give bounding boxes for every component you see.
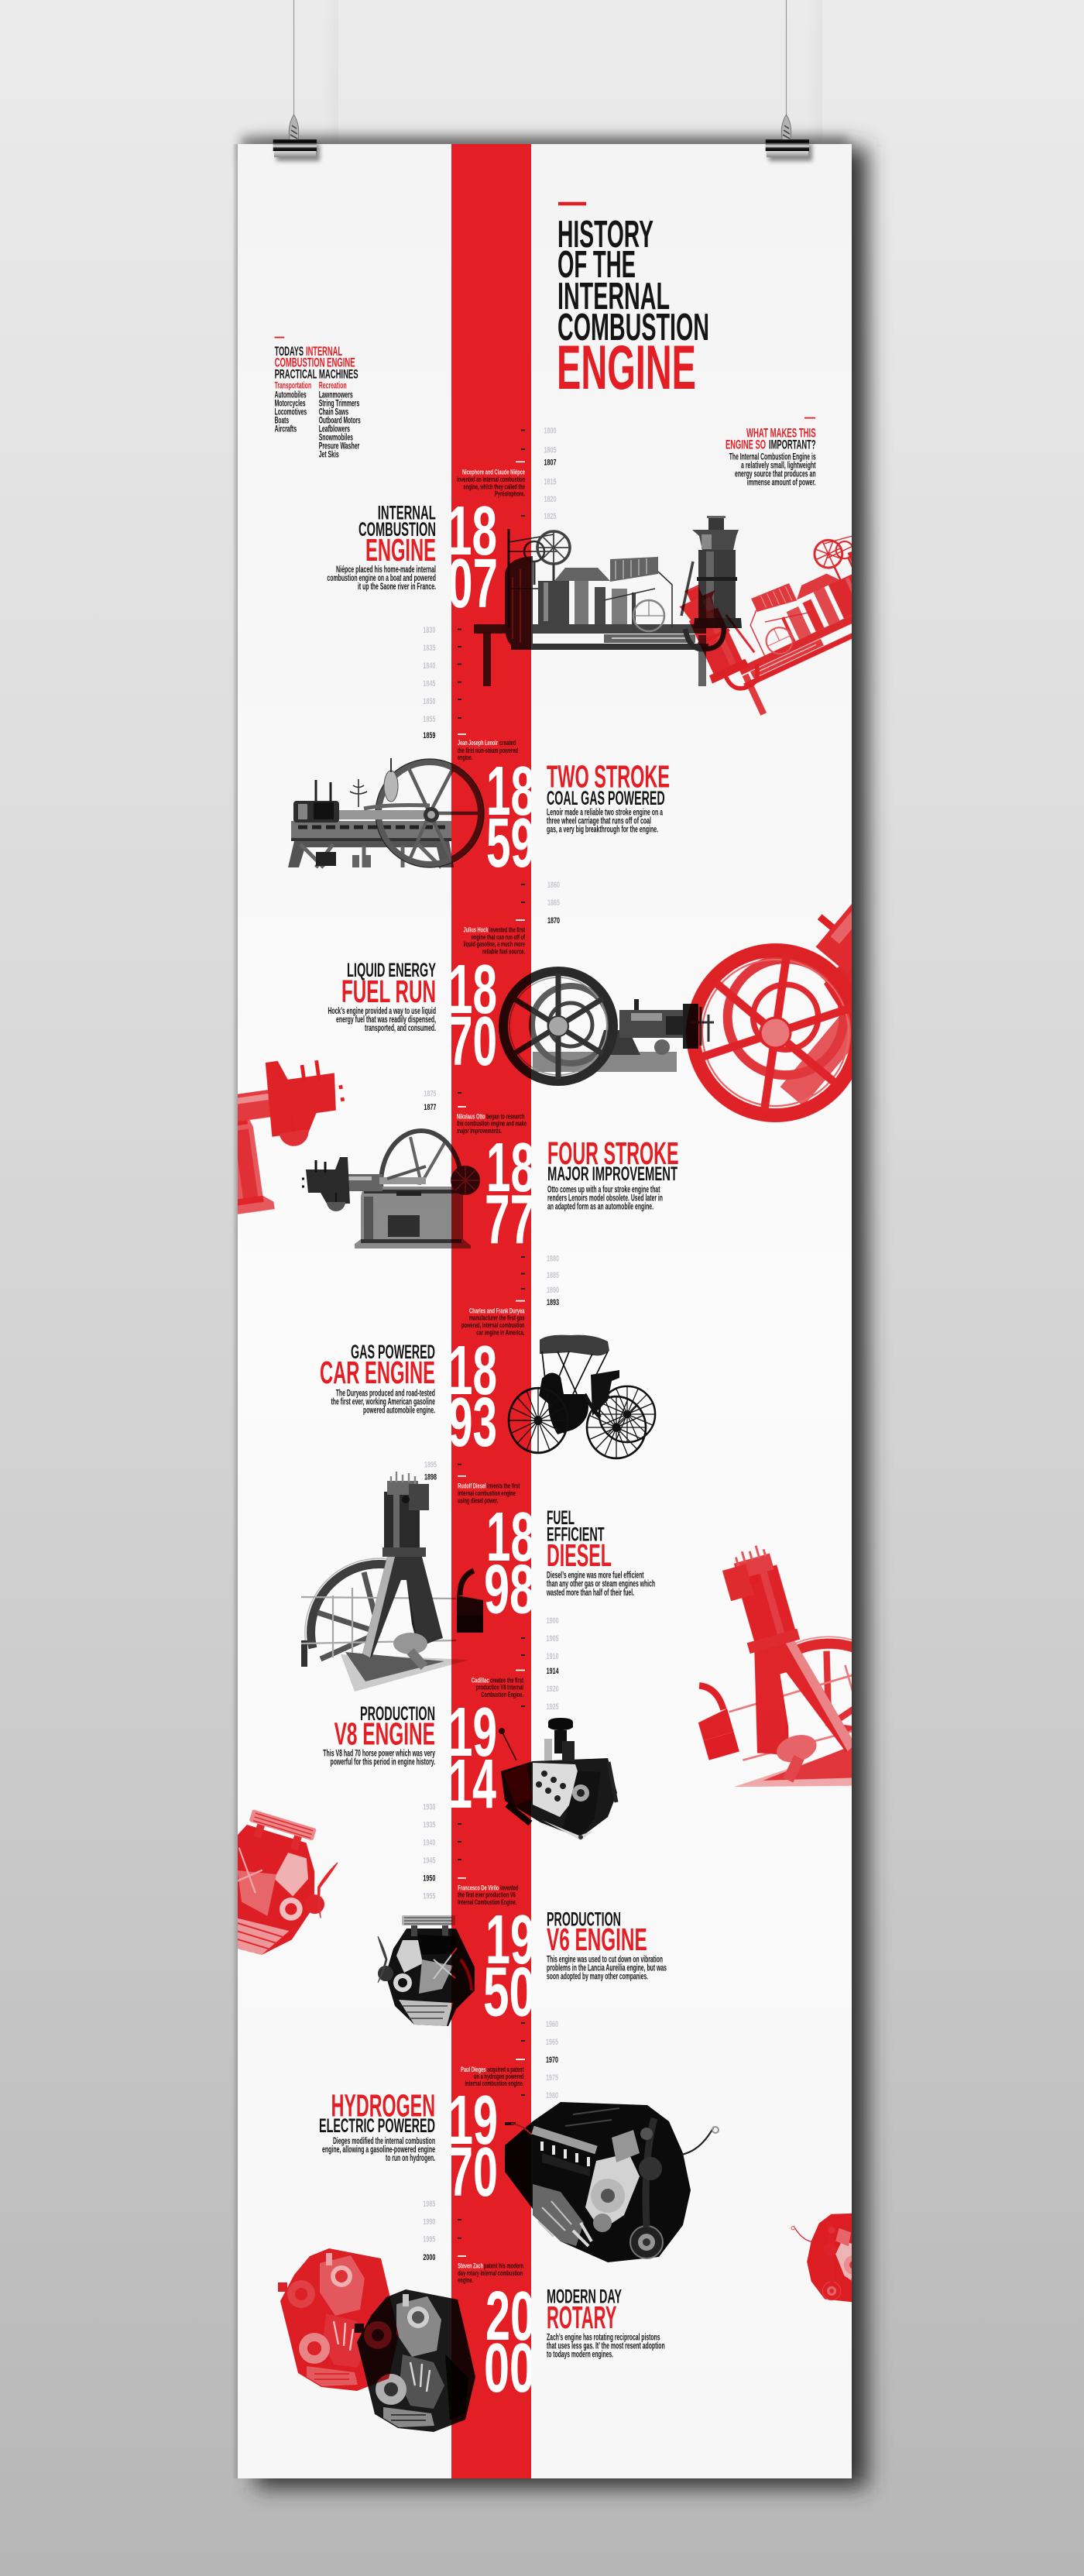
big years on the red band: 59	[486, 805, 535, 882]
caption 2000	[458, 2262, 523, 2285]
section 1898 text: than any other gas or steam engines which	[547, 1580, 655, 1589]
section 1870 text: transported, and consumed.	[365, 1024, 436, 1033]
red engine: V6 copy	[238, 1809, 338, 1955]
section 1970 text: to run on hydrogen.	[386, 2154, 435, 2163]
caption 1893	[461, 1307, 525, 1337]
caption 1859: Jean Joseph Lenoir	[458, 739, 498, 747]
why important panel: a relatively small, lightweight	[741, 462, 816, 471]
why important panel	[726, 417, 816, 488]
section 1859 text: gas, a very big breakthrough for the engine.	[547, 826, 658, 835]
timeline years left 1875-1877: 1877	[424, 1103, 436, 1112]
big years on the red band: 19	[485, 1901, 535, 1979]
section 1950 text	[547, 1908, 667, 1982]
big years on the red band: 07	[448, 545, 498, 623]
timeline years left 1930-1955: 1930	[423, 1803, 435, 1812]
section 1893 text: GAS POWERED	[351, 1341, 435, 1363]
section 1807 text	[327, 503, 436, 592]
caption 1877: began to research	[486, 1112, 525, 1121]
why important panel: IMPORTANT?	[769, 438, 816, 452]
section 1914 text: This V8 had 70 horse power which was very	[323, 1749, 435, 1758]
big years on the red band: 18	[486, 1129, 535, 1207]
caption 1877: the combustion engine and make	[457, 1120, 527, 1128]
caption 2000: engine.	[458, 2276, 473, 2285]
why important panel: immense amount of power.	[747, 479, 816, 488]
big years on the red band: 50	[483, 1953, 535, 2031]
timeline years right 1800-1825: 1815	[544, 477, 556, 486]
why important panel: The Internal Combustion Engine is	[729, 452, 816, 462]
section 1877 text: renders Lenoirs model obsolete. Used later in	[547, 1194, 663, 1204]
timeline years right 1880-1893: 1885	[547, 1271, 559, 1280]
timeline years right 1800-1825	[544, 427, 556, 521]
caption 1870	[463, 926, 526, 957]
title: OF THE	[557, 243, 636, 286]
practical machines panel: Recreation	[319, 382, 347, 391]
big years on the red band	[451, 506, 531, 2392]
big years on the red band: 70	[448, 1003, 497, 1080]
timeline years left 1985-2000: 2000	[423, 2253, 435, 2262]
practical machines panel: Locomotives	[275, 408, 307, 417]
timeline years left 1895-1898	[424, 1461, 437, 1482]
section 1950 text: This engine was used to cut down on vibration	[547, 1956, 663, 1965]
section 1807 text: it up the Saone river in France.	[358, 582, 436, 592]
engine illustration 1859	[288, 758, 484, 867]
timeline years left 1930-1955: 1955	[423, 1891, 435, 1901]
caption 1898: invents the first	[487, 1482, 520, 1491]
section 1870 text: LIQUID ENERGY	[347, 960, 436, 981]
timeline years right 1900-1925: 1900	[547, 1616, 559, 1626]
hanging clip right	[766, 0, 812, 161]
red engine: hydrogen copy	[791, 2214, 852, 2302]
timeline ticks	[458, 431, 525, 2256]
caption 1807: invented an internal combustion	[457, 476, 525, 484]
section 1898 text	[546, 1507, 655, 1598]
section 1859 text: Lenoir made a reliable two stroke engine on a	[547, 809, 663, 818]
big years on the red band: 20	[485, 2278, 535, 2355]
timeline years right 1880-1893: 1880	[547, 1255, 559, 1264]
section 1950 text: V6 ENGINE	[547, 1922, 647, 1957]
caption 1807: Pyréolophore.	[495, 490, 525, 499]
caption 1950: Internal Combustion Engine.	[458, 1898, 516, 1907]
red engine: 1877 copy	[238, 1060, 345, 1214]
section 2000 text	[547, 2286, 665, 2360]
practical machines panel: Boats	[275, 417, 289, 426]
caption 1970	[461, 2066, 524, 2088]
section 1893 text: The Duryeas produced and road-tested	[336, 1389, 435, 1399]
section 1807 text: COMBUSTION	[358, 519, 436, 541]
caption 1914: production V8 Internal	[476, 1684, 523, 1692]
big years on the red band: 18	[447, 493, 497, 570]
timeline years right 1900-1925: 1905	[547, 1634, 559, 1643]
practical machines panel: Snowmobiles	[319, 434, 353, 443]
section 1877 text: MAJOR IMPROVEMENT	[547, 1163, 678, 1185]
caption 1898	[458, 1482, 520, 1505]
caption 1807	[457, 469, 525, 499]
title	[557, 202, 709, 403]
practical machines panel: Leafblowers	[319, 425, 350, 434]
timeline years left 1895-1898: 1898	[424, 1473, 437, 1482]
section 2000 text: MODERN DAY	[547, 2286, 622, 2308]
caption 1807: engine, which they called the	[463, 483, 525, 491]
caption 2000: Steven Zach	[458, 2262, 483, 2271]
big years on the red band: 14	[448, 1746, 496, 1823]
caption 1870: reliable fuel source.	[482, 948, 525, 957]
timeline years left 1985-2000: 1990	[423, 2217, 435, 2227]
section 1893 text: CAR ENGINE	[320, 1355, 435, 1390]
section 1877 text: an adapted form as an automobile engine.	[547, 1202, 653, 1211]
section 1877 text: FOUR STROKE	[547, 1135, 678, 1171]
section 1870 text: energy fuel that was readily dispensed,	[336, 1015, 436, 1025]
timeline years right 1860-1870: 1860	[547, 881, 560, 890]
big years on the red band: 19	[448, 1694, 497, 1771]
section 1898 text: wasted more than half of their fuel.	[546, 1589, 634, 1598]
caption 1807: Nicephore and Claude Niépce	[462, 469, 525, 477]
section 1898 text: Diesel’s engine was more fuel efficient	[547, 1571, 644, 1581]
section 1807 text: INTERNAL	[378, 503, 436, 524]
timeline years right 1800-1825: 1800	[544, 427, 556, 436]
timeline years right 1900-1925: 1925	[547, 1702, 559, 1712]
caption 1950	[458, 1884, 519, 1907]
timeline years left 1830-1859: 1855	[423, 715, 435, 724]
engine illustration 1807	[474, 516, 742, 686]
why important panel: energy source that produces an	[735, 470, 816, 479]
practical machines panel	[275, 337, 361, 460]
caption 1970: on a hydrogen powered	[474, 2073, 524, 2081]
timeline years right 1900-1925: 1910	[547, 1652, 559, 1661]
poster sheet	[238, 144, 852, 2478]
section 1893 text: the first ever, working American gasoline	[331, 1397, 435, 1406]
caption 1877	[457, 1112, 527, 1135]
caption 2000: day rotary internal combustion	[458, 2269, 523, 2278]
timeline years left 1830-1859: 1845	[423, 679, 435, 689]
section 1870 text	[328, 960, 436, 1033]
caption 1914: Combustion Engine.	[481, 1691, 523, 1699]
caption 1950: Francesco De Virilo	[458, 1884, 499, 1892]
timeline years right 1960-1980	[546, 2020, 558, 2100]
section 2000 text: to todays modern engines.	[547, 2351, 613, 2360]
red engine: 1870 flywheel copy	[686, 904, 852, 1123]
practical machines panel: Chain Saws	[319, 408, 348, 417]
practical machines panel: Lawnmowers	[319, 391, 353, 400]
section 2000 text: that uses less gas. It’ the most resent adoption	[547, 2342, 665, 2351]
practical machines panel: Aircrafts	[275, 425, 297, 434]
why important panel: WHAT MAKES THIS	[746, 427, 816, 441]
caption 1859: the first non-steam powered	[458, 747, 518, 755]
caption 1893: car engine in America.	[476, 1328, 525, 1337]
timeline years left 1875-1877	[424, 1090, 436, 1112]
timeline years right 1800-1825: 1825	[544, 512, 556, 521]
timeline years left 1930-1955: 1935	[423, 1821, 435, 1830]
caption 1898: using diesel power.	[458, 1496, 498, 1505]
timeline years left 1895-1898: 1895	[424, 1461, 437, 1470]
section 1859 text: three wheel carriage that runs off of coal	[547, 816, 651, 826]
timeline years right 1860-1870: 1865	[547, 898, 560, 908]
timeline years right 1900-1925: 1920	[547, 1685, 559, 1694]
practical machines panel: Outboard Motors	[319, 417, 361, 426]
section 1970 text: Dieges modified the internal combustion	[333, 2137, 435, 2146]
caption 1970: acquired a patent	[487, 2066, 524, 2074]
big years on the red band: 18	[486, 753, 535, 830]
caption 1914: creates the first	[490, 1676, 524, 1685]
caption 1893: manufacturer the first gas	[469, 1314, 525, 1323]
practical machines panel: Jet Skis	[319, 451, 339, 460]
caption 1870: engine that can run off of	[472, 933, 526, 942]
practical machines panel: Transportation	[275, 382, 311, 391]
practical machines panel: Automobiles	[275, 391, 307, 400]
section 1870 text: Hock’s engine provided a way to use liquid	[328, 1007, 436, 1016]
section 1970 text: ELECTRIC POWERED	[319, 2115, 435, 2137]
caption 1950: invented	[500, 1884, 519, 1892]
timeline years right 1900-1925: 1914	[547, 1667, 559, 1676]
engine illustration 1950	[378, 1915, 475, 2026]
timeline years left 1830-1859	[423, 626, 435, 740]
section 1807 text: ENGINE	[365, 532, 436, 568]
section 1807 text: combustion engine on a boat and powered	[327, 574, 436, 583]
timeline years right 1800-1825: 1805	[544, 445, 556, 455]
caption 1870: liquid gasoline, a much more	[463, 940, 525, 949]
timeline years left 1830-1859: 1850	[423, 697, 435, 706]
big years on the red band: 19	[448, 2082, 498, 2159]
timeline years left 1985-2000: 1985	[423, 2200, 435, 2209]
timeline years left 1930-1955: 1950	[423, 1874, 435, 1884]
section 1859 text	[547, 759, 670, 835]
caption 1893: powered, internal combustion	[461, 1321, 525, 1330]
title: HISTORY	[557, 213, 653, 256]
caption 1970: Paul Dieges	[461, 2066, 486, 2074]
caption 2000: patent his modern	[484, 2262, 523, 2271]
practical machines panel: INTERNAL	[306, 345, 342, 359]
caption 1914	[472, 1676, 524, 1699]
section 1898 text: FUEL	[547, 1507, 575, 1529]
red engine: rotary copy	[278, 2248, 399, 2391]
caption 1898: internal combustion engine	[458, 1489, 516, 1498]
section 1970 text	[319, 2087, 435, 2163]
title: INTERNAL	[557, 275, 670, 318]
timeline years left 1930-1955	[423, 1803, 435, 1901]
big years on the red band: 77	[485, 1182, 535, 1259]
section 1970 text: HYDROGEN	[331, 2087, 435, 2123]
engine illustration 1877	[302, 1131, 480, 1249]
timeline years left 1985-2000: 1995	[423, 2235, 435, 2245]
timeline years left 1830-1859: 1840	[423, 661, 435, 671]
practical machines panel: String Trimmers	[319, 400, 359, 409]
timeline years left 1875-1877: 1875	[424, 1090, 436, 1099]
section 1914 text	[323, 1703, 435, 1767]
timeline years right 1960-1980: 1965	[546, 2038, 558, 2047]
section 1898 text: DIESEL	[547, 1537, 612, 1573]
timeline years left 1830-1859: 1835	[423, 644, 435, 653]
section 1877 text	[547, 1135, 678, 1211]
timeline years right 1880-1893: 1890	[547, 1286, 559, 1295]
timeline years left 1830-1859: 1830	[423, 626, 435, 635]
big years on the red band: 18	[486, 1499, 535, 1576]
central red band	[451, 144, 531, 2478]
title: ENGINE	[557, 333, 696, 403]
section 1950 text: problems in the Lancia Aureilia engine, but was	[547, 1964, 667, 1973]
big years on the red band: 18	[448, 1332, 497, 1410]
big years on the red band: 93	[448, 1384, 497, 1461]
engine illustration 1870	[503, 971, 714, 1081]
big years on the red band: 98	[484, 1551, 535, 1628]
red engine: 1807 copy	[679, 535, 852, 716]
practical machines panel: Presure Washer	[319, 442, 360, 452]
practical machines panel: COMBUSTION ENGINE	[275, 355, 355, 369]
caption 1877: Nikolaus Otto	[457, 1112, 485, 1121]
timeline years right 1860-1870	[547, 881, 560, 926]
timeline years left 1985-2000	[423, 2200, 435, 2262]
engine illustration 1970	[505, 2102, 719, 2262]
caption 1859: created	[499, 739, 516, 747]
timeline years right 1800-1825: 1820	[544, 495, 556, 504]
engine illustration 1914	[499, 1718, 617, 1840]
big years on the red band: 00	[484, 2330, 535, 2407]
hanging clip left	[273, 0, 320, 161]
practical machines panel: Motorcycles	[275, 400, 306, 409]
section 1893 text: powered automobile engine.	[363, 1406, 435, 1416]
section 1970 text: engine, allowing a gasoline-powered engine	[322, 2145, 435, 2155]
big years on the red band: 18	[448, 951, 497, 1029]
practical machines panel: PRACTICAL MACHINES	[275, 367, 358, 381]
big years on the red band: 70	[448, 2134, 498, 2211]
caption 1870: Julius Hock	[463, 926, 489, 935]
engine illustration 1898	[301, 1472, 483, 1692]
timeline years right 1900-1925	[547, 1616, 559, 1712]
caption 1859: engine.	[458, 754, 472, 762]
section 1870 text: FUEL RUN	[341, 974, 436, 1009]
timeline years right 1880-1893	[547, 1255, 559, 1307]
timeline years right 1960-1980: 1980	[546, 2091, 558, 2100]
section 2000 text: Zach’s engine has rotating reciprocal pistons	[547, 2334, 660, 2343]
timeline years right 1800-1825: 1807	[544, 458, 556, 467]
why important panel: ENGINE SO	[726, 438, 766, 452]
section 1914 text: V8 ENGINE	[334, 1716, 435, 1751]
section 1859 text: TWO STROKE	[547, 759, 670, 795]
caption 1877: major improvements.	[457, 1127, 502, 1135]
timeline years right 1860-1870: 1870	[547, 916, 560, 926]
timeline years left 1830-1859: 1859	[423, 731, 435, 740]
caption 1914: Cadillac	[472, 1676, 489, 1685]
section 2000 text: ROTARY	[547, 2300, 616, 2335]
caption 1870: invented the first	[489, 926, 525, 935]
red engine: 1898 diesel copy	[698, 1545, 852, 1788]
caption 1950: the first ever production V6	[458, 1891, 516, 1900]
caption 1970: internal combustion engine.	[465, 2080, 523, 2088]
section 1893 text	[320, 1341, 435, 1416]
section 1807 text: Niépce placed his home-made internal	[336, 565, 436, 575]
car illustration 1893	[509, 1335, 655, 1458]
caption 1898: Rudolf Diesel	[458, 1482, 486, 1491]
timeline years right 1880-1893: 1893	[547, 1298, 559, 1307]
engine illustration 2000	[355, 2289, 475, 2432]
timeline years left 1930-1955: 1940	[423, 1839, 435, 1848]
poster shadow	[232, 136, 867, 2488]
caption 1859	[458, 739, 518, 762]
timeline years right 1960-1980: 1975	[546, 2073, 558, 2083]
section 1914 text: powerful for this period in engine history.	[330, 1758, 435, 1767]
practical machines panel: TODAYS	[275, 345, 304, 359]
section 1898 text: EFFICIENT	[547, 1524, 605, 1546]
timeline years right 1960-1980: 1970	[546, 2056, 558, 2065]
section 1950 text: soon adopted by many other companies.	[547, 1973, 648, 1982]
section 1914 text: PRODUCTION	[360, 1703, 435, 1725]
caption 1893: Charles and Frank Duryea	[469, 1307, 525, 1315]
timeline years left 1930-1955: 1945	[423, 1856, 435, 1866]
title: COMBUSTION	[557, 306, 709, 349]
section 1859 text: COAL GAS POWERED	[547, 788, 665, 809]
section 1950 text: PRODUCTION	[547, 1908, 621, 1930]
section 1877 text: Otto comes up with a four stroke engine that	[547, 1185, 660, 1194]
timeline years right 1960-1980: 1960	[546, 2020, 558, 2029]
